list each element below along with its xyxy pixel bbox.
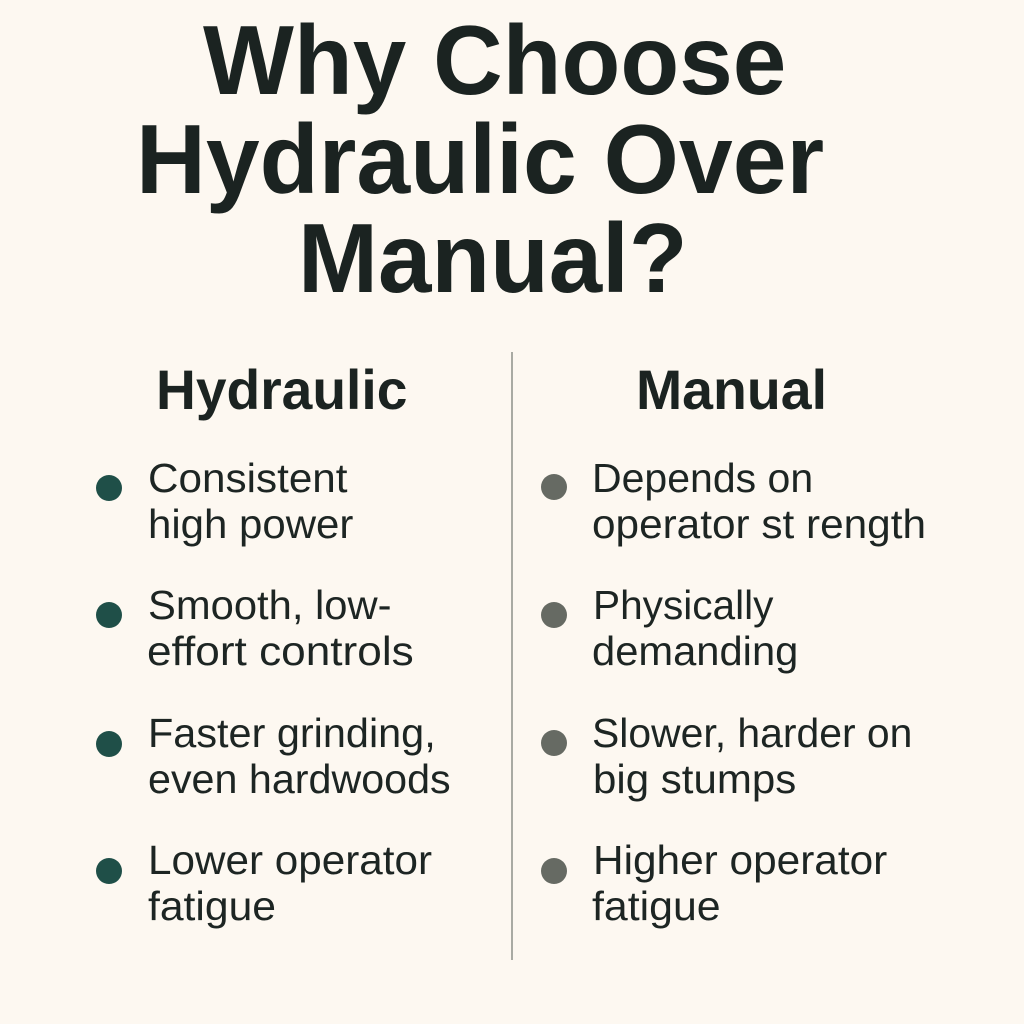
title: Manual? [298,203,688,313]
title [136,5,824,313]
text: higher fatigue [592,837,887,929]
icon: bullet 4 [96,858,122,884]
text: depends on operator strength: Depends on [592,455,813,501]
text: physically demanding: demanding [592,628,798,674]
title: Hydraulic Over [136,104,824,214]
text: higher fatigue: fatigue [592,883,721,929]
text: lower fatigue: fatigue [148,883,276,929]
icon: bullet 2 [541,602,567,628]
heading: hydraulic: Hydraulic [156,358,407,421]
icon: bullet 3 [96,730,122,756]
text: slower: Slower, harder on [592,710,912,756]
text: smooth controls: Smooth, low- [148,582,392,628]
text: higher fatigue: Higher operator [593,837,887,883]
divider between columns [511,352,513,960]
icon: bullet 1 [96,474,122,500]
text: slower: big stumps [593,756,796,802]
text: slower [592,710,912,802]
text: smooth controls [147,582,414,674]
text: smooth controls: effort controls [147,628,414,674]
icon: bullet 3 [541,730,567,756]
text: lower fatigue: Lower operator [148,837,432,883]
text: depends on operator strength: operator st rength [592,501,926,547]
text: faster grinding: even hardwoods [148,756,451,802]
heading: manual: Manual [636,358,826,421]
icon: bullet 1 [541,474,567,500]
text: faster grinding [148,710,451,802]
icon: bullet 4 [541,858,567,884]
text: faster grinding: Faster grinding, [148,710,436,756]
icon: bullet 2 [96,602,122,628]
panel: manual [541,358,926,929]
text: depends on operator strength [592,455,926,547]
text: physically demanding: Physically [593,582,773,628]
title: Why Choose [203,5,786,115]
text: consistent high power: high power [148,501,353,547]
text: consistent high power: Consistent [148,455,348,501]
text: consistent high power [148,455,353,547]
panel: hydraulic [96,358,451,929]
text: physically demanding [592,582,798,674]
text: lower fatigue [148,837,432,929]
